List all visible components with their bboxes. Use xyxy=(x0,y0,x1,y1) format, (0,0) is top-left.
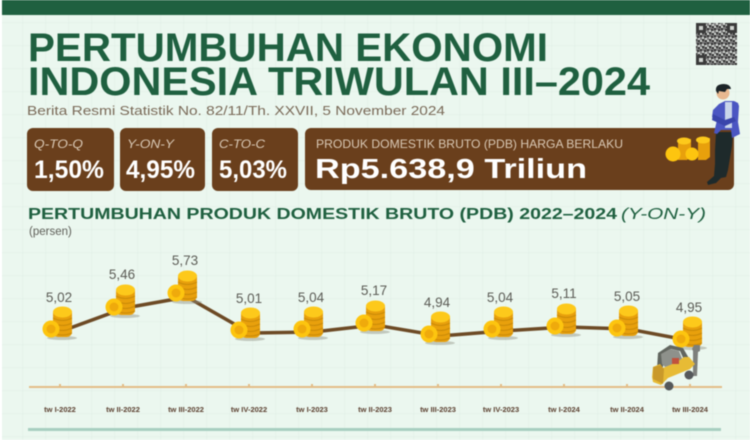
quarter labels: tw I-2022 xyxy=(44,405,76,414)
quarter labels xyxy=(44,405,709,414)
line chart: PDB growth xyxy=(29,253,722,414)
quarter labels: tw IV-2023 xyxy=(483,405,519,414)
quarter labels: tw IV-2022 xyxy=(231,405,267,414)
quarter labels: tw II-2024 xyxy=(610,405,645,414)
baseline axis with ticks xyxy=(29,384,722,387)
stat card: C-to-C xyxy=(212,128,298,191)
wheels xyxy=(664,382,674,390)
value labels: 4,95 xyxy=(676,300,702,315)
value labels: 5,01 xyxy=(236,291,262,306)
unit label: (persen) xyxy=(29,226,72,238)
quarter labels: tw I-2024 xyxy=(548,405,581,414)
cab xyxy=(657,345,690,369)
value labels: 5,05 xyxy=(614,289,640,304)
quarter labels: tw III-2022 xyxy=(168,405,204,414)
stat card: Q-to-Q xyxy=(27,128,114,191)
value labels: 5,04 xyxy=(298,290,325,305)
footer divider xyxy=(28,428,721,431)
subtitle: Berita Resmi Statistik No. 82/11/Th. XXVII, 5 November 2024 xyxy=(27,103,445,118)
stat card: Q-to-Q: 1,50% xyxy=(34,156,104,184)
mast xyxy=(692,345,700,376)
coin markers xyxy=(42,270,707,350)
stat card: PDB harga berlaku xyxy=(305,128,734,190)
value labels: 5,04 xyxy=(487,290,514,305)
head xyxy=(716,86,730,100)
icon: gold coins on card xyxy=(666,136,710,162)
stat card: Q-to-Q: Q-TO-Q xyxy=(34,139,83,151)
quarter labels: tw I-2023 xyxy=(296,405,328,414)
stat card: C-to-C: C-TO-C xyxy=(219,139,266,151)
stat card: PDB harga berlaku: PRODUK DOMESTIK BRUTO (PDB) HARGA BERLAKU xyxy=(316,137,623,151)
stat card: C-to-C: 5,03% xyxy=(219,156,287,184)
value labels: 4,94 xyxy=(424,295,451,310)
quarter labels: tw III-2024 xyxy=(672,405,709,414)
icon: forklift xyxy=(652,345,700,390)
value labels: 5,73 xyxy=(172,253,198,268)
value labels: 5,02 xyxy=(46,290,72,305)
value labels: 5,11 xyxy=(551,286,577,301)
value labels: 5,17 xyxy=(361,283,387,298)
icon: businessman xyxy=(707,84,740,185)
quarter labels: tw II-2023 xyxy=(358,405,392,414)
stat card: Y-on-Y: Y-ON-Y xyxy=(127,139,176,151)
stat card: Y-on-Y xyxy=(120,128,205,191)
title: PERTUMBUHAN EKONOMI xyxy=(28,26,548,70)
top banner xyxy=(2,0,750,15)
chart heading: (Y-ON-Y) xyxy=(621,206,706,223)
body xyxy=(652,357,695,385)
quarter labels: tw III-2023 xyxy=(420,405,456,414)
shirt and jacket xyxy=(712,101,740,138)
title xyxy=(28,26,651,104)
title: INDONESIA TRIWULAN III–2024 xyxy=(28,60,651,104)
quarter labels: tw II-2022 xyxy=(106,405,140,414)
QR code xyxy=(696,23,737,65)
stat card: PDB harga berlaku: Rp5.638,9 Triliun xyxy=(315,153,587,184)
stat card: Y-on-Y: 4,95% xyxy=(126,156,195,184)
value labels: 5,46 xyxy=(109,267,135,282)
legs xyxy=(707,132,733,185)
chart heading: PERTUMBUHAN PRODUK DOMESTIK BRUTO (PDB) 2022–2024 xyxy=(28,206,617,223)
trend line xyxy=(62,297,692,341)
value labels xyxy=(46,253,702,315)
